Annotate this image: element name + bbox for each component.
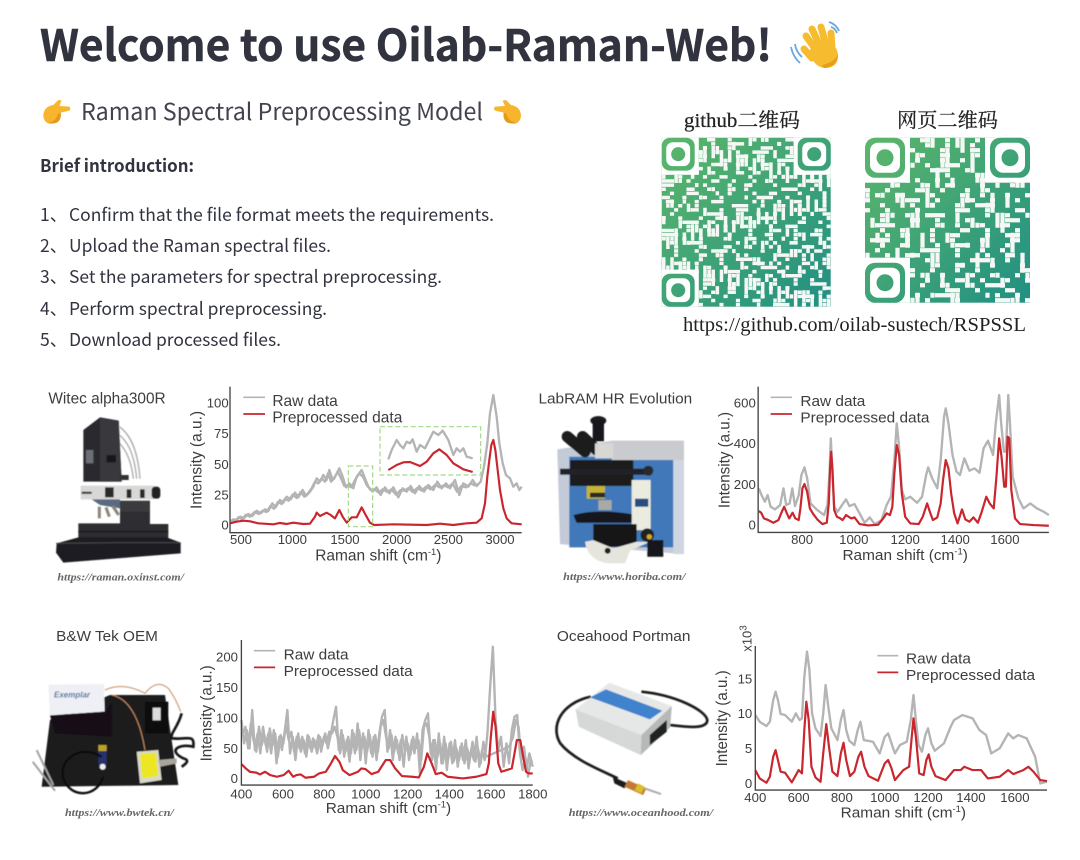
chart: Portman spectra: 1200 — [913, 790, 943, 805]
chart: Witec spectra: ) — [436, 547, 441, 564]
title: Welcome to use Oilab-Raman-Web! — [40, 11, 772, 74]
chart: LabRAM spectra: Intensity (a.u.) — [716, 412, 733, 508]
icon: waving hand — [791, 22, 839, 68]
chart: LabRAM spectra — [716, 387, 1049, 564]
step list: 1、 — [40, 202, 67, 227]
chart: Witec spectra: 0 — [221, 518, 229, 533]
chart: Portman spectra: 800 — [831, 790, 853, 805]
chart: LabRAM spectra: 1000 — [839, 532, 868, 547]
step list: Perform spectral preprocessing. — [69, 296, 327, 321]
heading: brief introduction: Brief introduction: — [40, 153, 194, 178]
chart: LabRAM spectra: 400 — [734, 436, 756, 451]
step list: Set the parameters for spectral preprocessing. — [69, 264, 442, 289]
source URL: https://raman.oxinst.com/ — [57, 572, 185, 584]
chart: B&W Tek spectra: -1 — [438, 798, 446, 809]
chart: Portman spectra: -1 — [953, 803, 961, 814]
panel: LabRAM HR Evolution — [538, 387, 1049, 583]
photo: B&W Tek setup — [33, 684, 194, 793]
chart: B&W Tek spectra: Raman shift (cm — [326, 800, 438, 817]
chart: B&W Tek spectra: 0 — [231, 771, 238, 786]
heading: model name: Raman Spectral Preprocessing Model — [81, 93, 483, 127]
photo: Witec microscope — [56, 417, 181, 563]
chart: Witec spectra — [189, 387, 522, 564]
panel: Oceahood Portman — [556, 625, 1047, 821]
chart: Witec spectra: 75 — [214, 426, 229, 441]
chart: B&W Tek spectra: Raw data — [284, 646, 349, 663]
chart: B&W Tek spectra: 200 — [216, 649, 238, 664]
chart: B&W Tek spectra: Preprocessed data — [284, 663, 413, 680]
chart: Portman spectra: ) — [961, 805, 966, 821]
step list: Download processed files. — [69, 327, 281, 352]
chart: B&W Tek spectra: 1000 — [351, 787, 380, 801]
step list: 4、 — [40, 296, 67, 321]
photo: Portman spectrometer — [556, 683, 707, 795]
photo: LabRAM microscope — [557, 416, 684, 563]
chart: Portman spectra: 15 — [738, 672, 752, 687]
chart: LabRAM spectra: 200 — [734, 477, 756, 492]
chart: LabRAM spectra: 0 — [748, 518, 756, 533]
chart: LabRAM spectra: -1 — [954, 546, 963, 557]
chart: LabRAM spectra: Raman shift (cm — [842, 547, 954, 564]
chart: Portman spectra — [714, 625, 1047, 821]
instrument name: Witec alpha300R — [48, 390, 166, 407]
chart: LabRAM spectra: 600 — [734, 395, 756, 410]
chart: B&W Tek spectra — [199, 640, 547, 817]
chart: Witec spectra: Preprocessed data — [272, 410, 403, 427]
chart: LabRAM spectra: 1200 — [891, 532, 920, 547]
chart: B&W Tek spectra: 1600 — [476, 787, 505, 801]
chart: Witec spectra: Intensity (a.u.) — [189, 411, 206, 509]
chart: Portman spectra: 0 — [745, 776, 752, 791]
step list — [40, 202, 494, 352]
chart: Witec spectra: 1500 — [330, 532, 360, 547]
step list: Confirm that the file format meets the requirements. — [69, 202, 494, 227]
chart: B&W Tek spectra: 50 — [223, 741, 238, 756]
QR code: web page — [865, 138, 1030, 303]
chart: LabRAM spectra: 1400 — [941, 532, 970, 547]
chart: Witec spectra: 3000 — [485, 532, 515, 547]
chart: Portman spectra: 3 — [738, 625, 750, 631]
chart: Witec spectra: Raman shift (cm — [315, 547, 428, 564]
panel: B&W Tek OEM — [33, 628, 547, 819]
step list: 3、 — [40, 264, 67, 289]
chart: Witec spectra: 1000 — [278, 532, 307, 547]
chart: LabRAM spectra: Preprocessed data — [800, 410, 930, 427]
chart: B&W Tek spectra: 1800 — [518, 787, 547, 801]
chart: Portman spectra: 5 — [745, 741, 752, 756]
source URL: https://www.oceanhood.com/ — [569, 807, 714, 819]
icon: pointing left hand — [494, 100, 521, 124]
chart: B&W Tek spectra: 400 — [230, 787, 252, 801]
panel: Witec alpha300R — [48, 387, 522, 584]
chart: Witec spectra: 50 — [214, 457, 229, 472]
chart: B&W Tek spectra: 1400 — [435, 787, 464, 801]
chart: LabRAM spectra: 800 — [791, 532, 813, 547]
chart: B&W Tek spectra: 800 — [313, 787, 335, 801]
chart: Witec spectra: 2000 — [382, 532, 411, 547]
chart: Portman spectra: Raman shift (cm — [841, 805, 953, 821]
chart: Witec spectra: Raw data — [272, 393, 338, 410]
chart: Witec spectra: -1 — [428, 547, 436, 557]
QR code: github — [658, 134, 835, 311]
label: web QR: 网页二维码 — [897, 109, 998, 132]
instrument name: B&W Tek OEM — [56, 628, 158, 645]
chart: Portman spectra: 1000 — [870, 790, 899, 805]
photo: B&W Tek setup: Exemplar — [54, 690, 91, 699]
step list: 2、 — [40, 233, 67, 258]
chart: LabRAM spectra: 1600 — [990, 532, 1020, 547]
chart: Portman spectra: 10 — [738, 706, 752, 721]
chart: Portman spectra: Raw data — [906, 651, 971, 668]
chart: B&W Tek spectra: 600 — [272, 787, 294, 801]
chart: LabRAM spectra: ) — [963, 547, 968, 564]
icon: pointing right hand — [43, 100, 70, 124]
chart: Portman spectra: 1600 — [1000, 790, 1030, 805]
chart: Witec spectra: 100 — [207, 395, 229, 410]
chart: Portman spectra: Intensity (a.u.) — [714, 670, 731, 766]
source URL: https://www.horiba.com/ — [563, 571, 686, 583]
chart: Portman spectra: 1400 — [956, 790, 986, 805]
chart: B&W Tek spectra: 1200 — [393, 787, 422, 801]
chart: Portman spectra: 600 — [788, 790, 810, 805]
instrument name: LabRAM HR Evolution — [538, 390, 692, 407]
chart: Witec spectra: 25 — [214, 488, 229, 503]
chart: B&W Tek spectra: Intensity (a.u.) — [199, 665, 216, 761]
chart: Portman spectra: x10 — [739, 631, 754, 652]
chart: Witec spectra: 500 — [230, 532, 252, 547]
repository URL: https://github.com/oilab-sustech/RSPSSL — [683, 314, 1026, 336]
label: github QR: github二维码 — [684, 109, 800, 132]
chart: LabRAM spectra: Raw data — [800, 393, 866, 410]
chart: Portman spectra: 400 — [744, 790, 766, 805]
chart: B&W Tek spectra: ) — [446, 800, 451, 817]
source URL: https://www.bwtek.cn/ — [65, 807, 175, 819]
chart: B&W Tek spectra: 100 — [216, 710, 238, 725]
chart: Portman spectra: Preprocessed data — [906, 667, 1036, 684]
chart: B&W Tek spectra: 150 — [216, 680, 238, 695]
step list: 5、 — [40, 327, 67, 352]
step list: Upload the Raman spectral files. — [69, 233, 331, 258]
chart: Witec spectra: 2500 — [434, 532, 463, 547]
instrument name: Oceahood Portman — [557, 628, 690, 645]
